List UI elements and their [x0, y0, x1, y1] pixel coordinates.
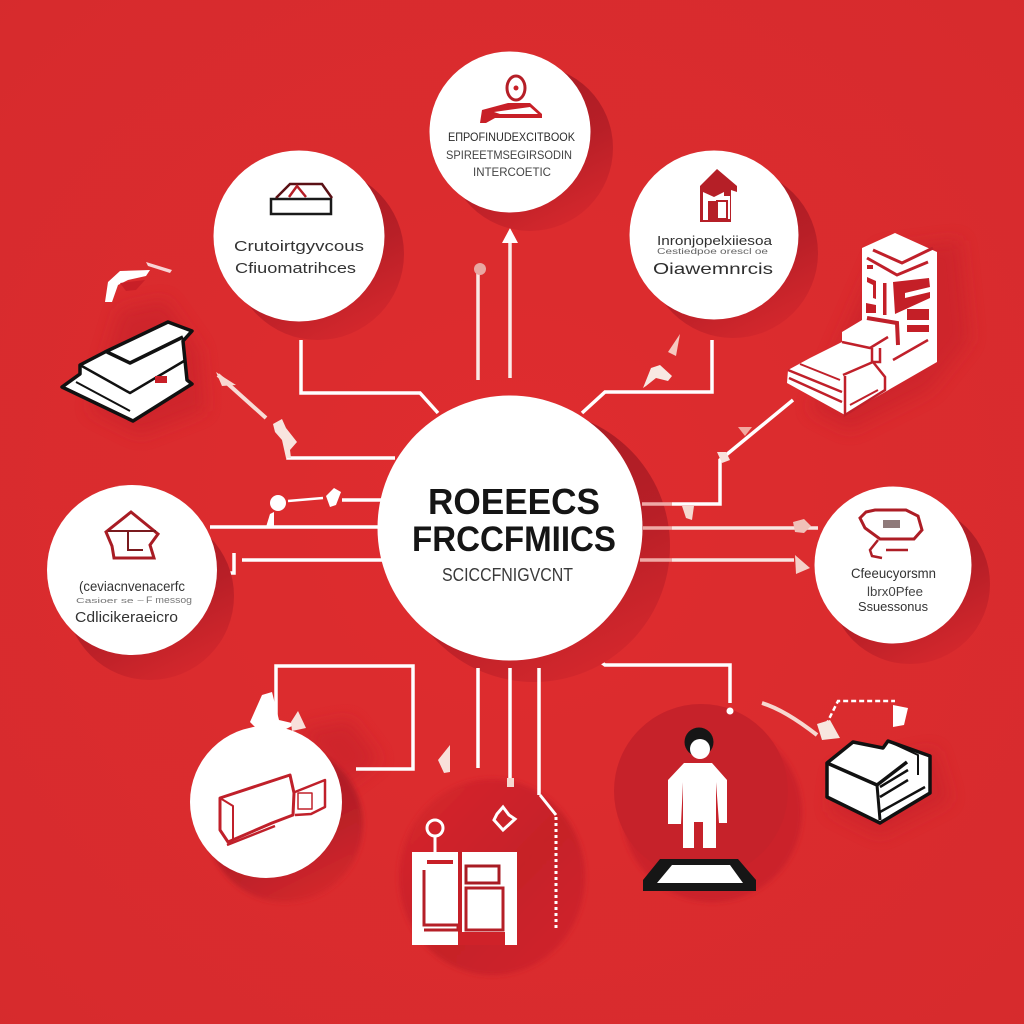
- connector lines: right side over centre shadow: [640, 400, 818, 560]
- icon: stacked book left: [62, 322, 192, 421]
- text block: F messog: [146, 595, 192, 605]
- title text: ROEEECS: [428, 481, 600, 522]
- connector lines: bottom drops and dotted line: [478, 668, 556, 928]
- text block: Crutoirtgyvcous: [234, 238, 364, 255]
- panel: top circle: [430, 52, 613, 231]
- text block: (ceviacnvenacerfc: [79, 578, 185, 594]
- panel: upper right circle: [630, 150, 818, 338]
- icon: house outline: [106, 512, 158, 558]
- icon: cloud and arrow: [860, 510, 922, 558]
- icon: house: [700, 169, 737, 222]
- panel: lower left circle with device: [190, 726, 363, 902]
- panel: right circle: [814, 486, 990, 664]
- icon: platform: [643, 859, 756, 891]
- icon: person: [668, 728, 727, 848]
- text block: Oiawemnrcis: [653, 261, 773, 278]
- text block: INTERCOETIC: [473, 165, 551, 179]
- text block: [851, 565, 936, 614]
- text block: [75, 578, 192, 626]
- icon: heart badge: [494, 807, 515, 830]
- drop shadows behind icons: [90, 240, 970, 835]
- icon: flame on tray: [480, 76, 542, 123]
- title text: SCICCFNIGVCNT: [442, 565, 573, 585]
- text block: [446, 130, 575, 179]
- text block: Ssuessonus: [858, 599, 928, 614]
- icon: camera outline: [220, 775, 325, 845]
- panel: central circle: [378, 396, 670, 682]
- text block: Cdlicikeraeicro: [75, 609, 178, 626]
- text block: Cestiedpoe orescl oe: [657, 247, 769, 256]
- panel: bottom document block on dark circle: [399, 779, 585, 975]
- title text: [412, 481, 616, 585]
- arrowhead on top connector: [502, 228, 518, 243]
- text block: [653, 233, 773, 278]
- text block: SPIREETMSEGIRSODIN: [446, 148, 572, 162]
- icon: document cabinet: [412, 852, 517, 945]
- arrow ends and small connector marks: [105, 262, 908, 787]
- text block: ЕПРОFINUDEXCITBOOK: [448, 130, 575, 144]
- panel: upper left circle: [214, 150, 404, 340]
- text block: [234, 238, 364, 277]
- panel: left circle: [47, 485, 234, 680]
- icon: ring pin: [427, 820, 443, 852]
- text block: lbrx0Pfee: [867, 584, 923, 599]
- text block: Inronjopelxiiesoa: [657, 233, 773, 248]
- icon: open box: [271, 184, 332, 214]
- panel: person on dark circle: [614, 704, 802, 902]
- text block: Casioer se ~: [76, 598, 144, 605]
- title text: FRCCFMIICS: [412, 520, 616, 559]
- icon: printer box right: [827, 741, 930, 823]
- connector lines: [210, 240, 895, 769]
- text block: Cfeeucyorsmn: [851, 565, 936, 581]
- text block: Cfiuomatrihces: [235, 260, 356, 277]
- icon: isometric building right: [787, 233, 937, 415]
